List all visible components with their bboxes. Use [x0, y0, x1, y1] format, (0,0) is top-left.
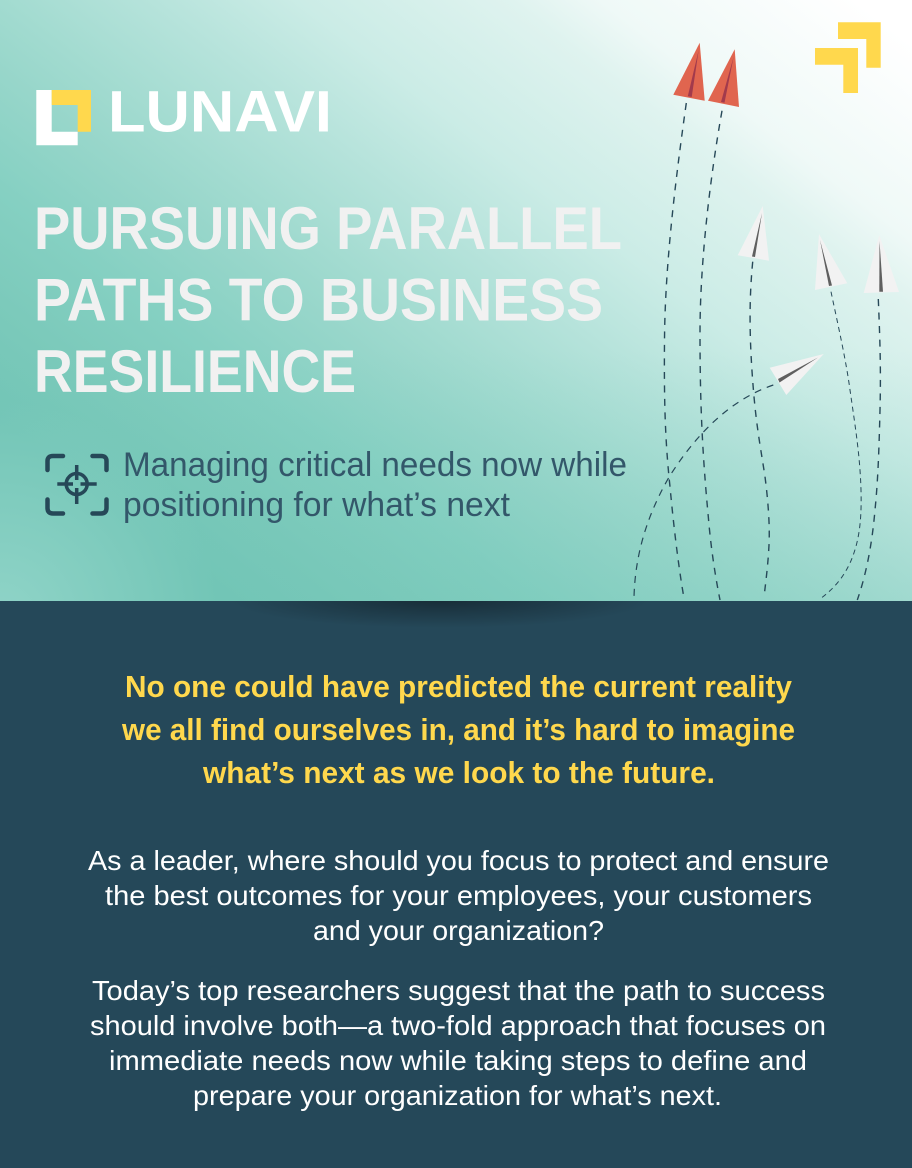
subtitle: Managing critical needs now while	[123, 446, 627, 484]
title: PURSUING PARALLEL	[34, 195, 622, 262]
highlighted statement: No one could have predicted the current reality	[125, 670, 792, 704]
icon: yellow chevrons	[815, 22, 881, 93]
icon: target crosshair	[48, 456, 106, 514]
body text: leader question: and your organization?	[313, 915, 604, 946]
body text: leader question	[88, 845, 829, 946]
body text: research suggestion	[90, 975, 826, 1111]
icon: red paper plane left	[673, 43, 705, 101]
highlighted statement	[121, 670, 795, 790]
highlighted statement: we all find ourselves in, and it’s hard to imagine	[121, 713, 795, 747]
body text: research suggestion: immediate needs now while taking steps to define and	[109, 1045, 807, 1076]
logo: Lunavi: LUNAVI	[108, 80, 332, 145]
subtitle	[123, 446, 627, 524]
title: RESILIENCE	[34, 338, 356, 405]
icon: white paper plane three	[864, 235, 899, 293]
highlighted statement: what’s next as we look to the future.	[202, 756, 715, 790]
icon: white paper plane two	[815, 234, 847, 290]
dashed flight paths	[634, 103, 880, 600]
body text: research suggestion: Today’s top researchers suggest that the path to success	[92, 975, 825, 1006]
subtitle: positioning for what’s next	[123, 486, 511, 524]
panel: teal header background	[0, 0, 912, 601]
panel: dark lower section	[0, 601, 912, 1168]
body text: leader question: As a leader, where should you focus to protect and ensure	[88, 845, 829, 876]
body text: research suggestion: prepare your organization for what’s next.	[193, 1080, 722, 1111]
title: PATHS TO BUSINESS	[34, 266, 603, 334]
body text: leader question: the best outcomes for your employees, your customers	[105, 880, 812, 911]
body text: research suggestion: should involve both—a two-fold approach that focuses on	[90, 1010, 826, 1041]
icon: white paper plane four	[770, 354, 824, 395]
icon: red paper plane right	[708, 49, 739, 107]
icon: white paper plane one	[738, 206, 769, 261]
title	[34, 195, 622, 405]
